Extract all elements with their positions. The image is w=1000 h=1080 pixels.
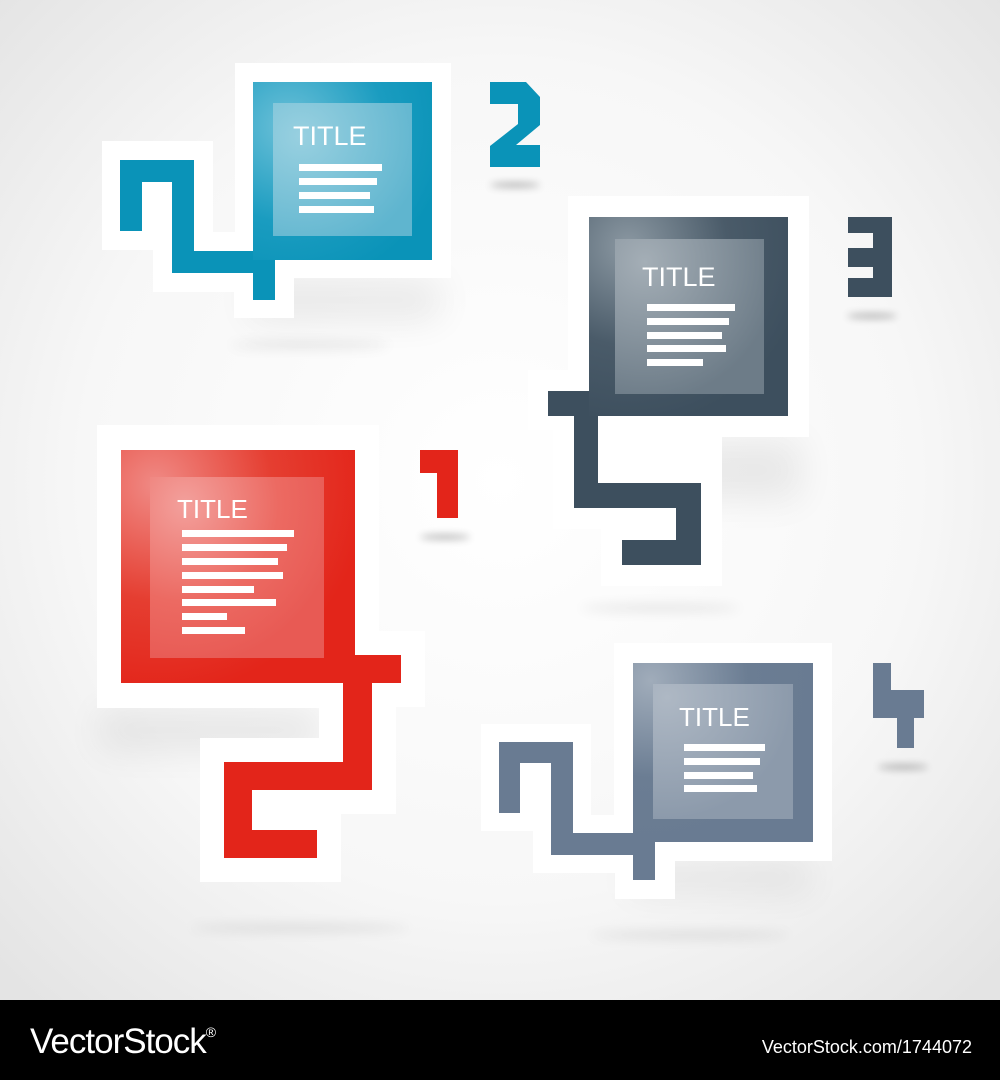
title: dark: TITLE — [642, 262, 716, 292]
title: blue: TITLE — [293, 121, 367, 151]
number 3 — [848, 217, 892, 297]
text lines: dark — [647, 304, 735, 366]
panel: step 2 (blue) — [102, 63, 451, 318]
footer: url: VectorStock.com/1744072 — [762, 1037, 972, 1057]
footer bar — [0, 1000, 1000, 1080]
panel: step 1 (red) — [97, 425, 425, 882]
panel: step 3 (dark grey) — [528, 196, 809, 586]
footer: brand: VectorStock — [30, 1022, 206, 1061]
text lines: red — [182, 530, 294, 634]
title: slate: TITLE — [679, 702, 750, 732]
text lines: blue — [299, 164, 382, 213]
number 2 — [490, 82, 540, 167]
text lines: slate — [684, 744, 765, 792]
shadows — [100, 280, 810, 892]
number 4 — [873, 663, 924, 748]
panel: step 4 (slate) — [481, 643, 832, 899]
number 1 — [420, 450, 458, 518]
title: red: TITLE — [177, 494, 248, 524]
footer: brand: ® — [206, 1024, 217, 1040]
